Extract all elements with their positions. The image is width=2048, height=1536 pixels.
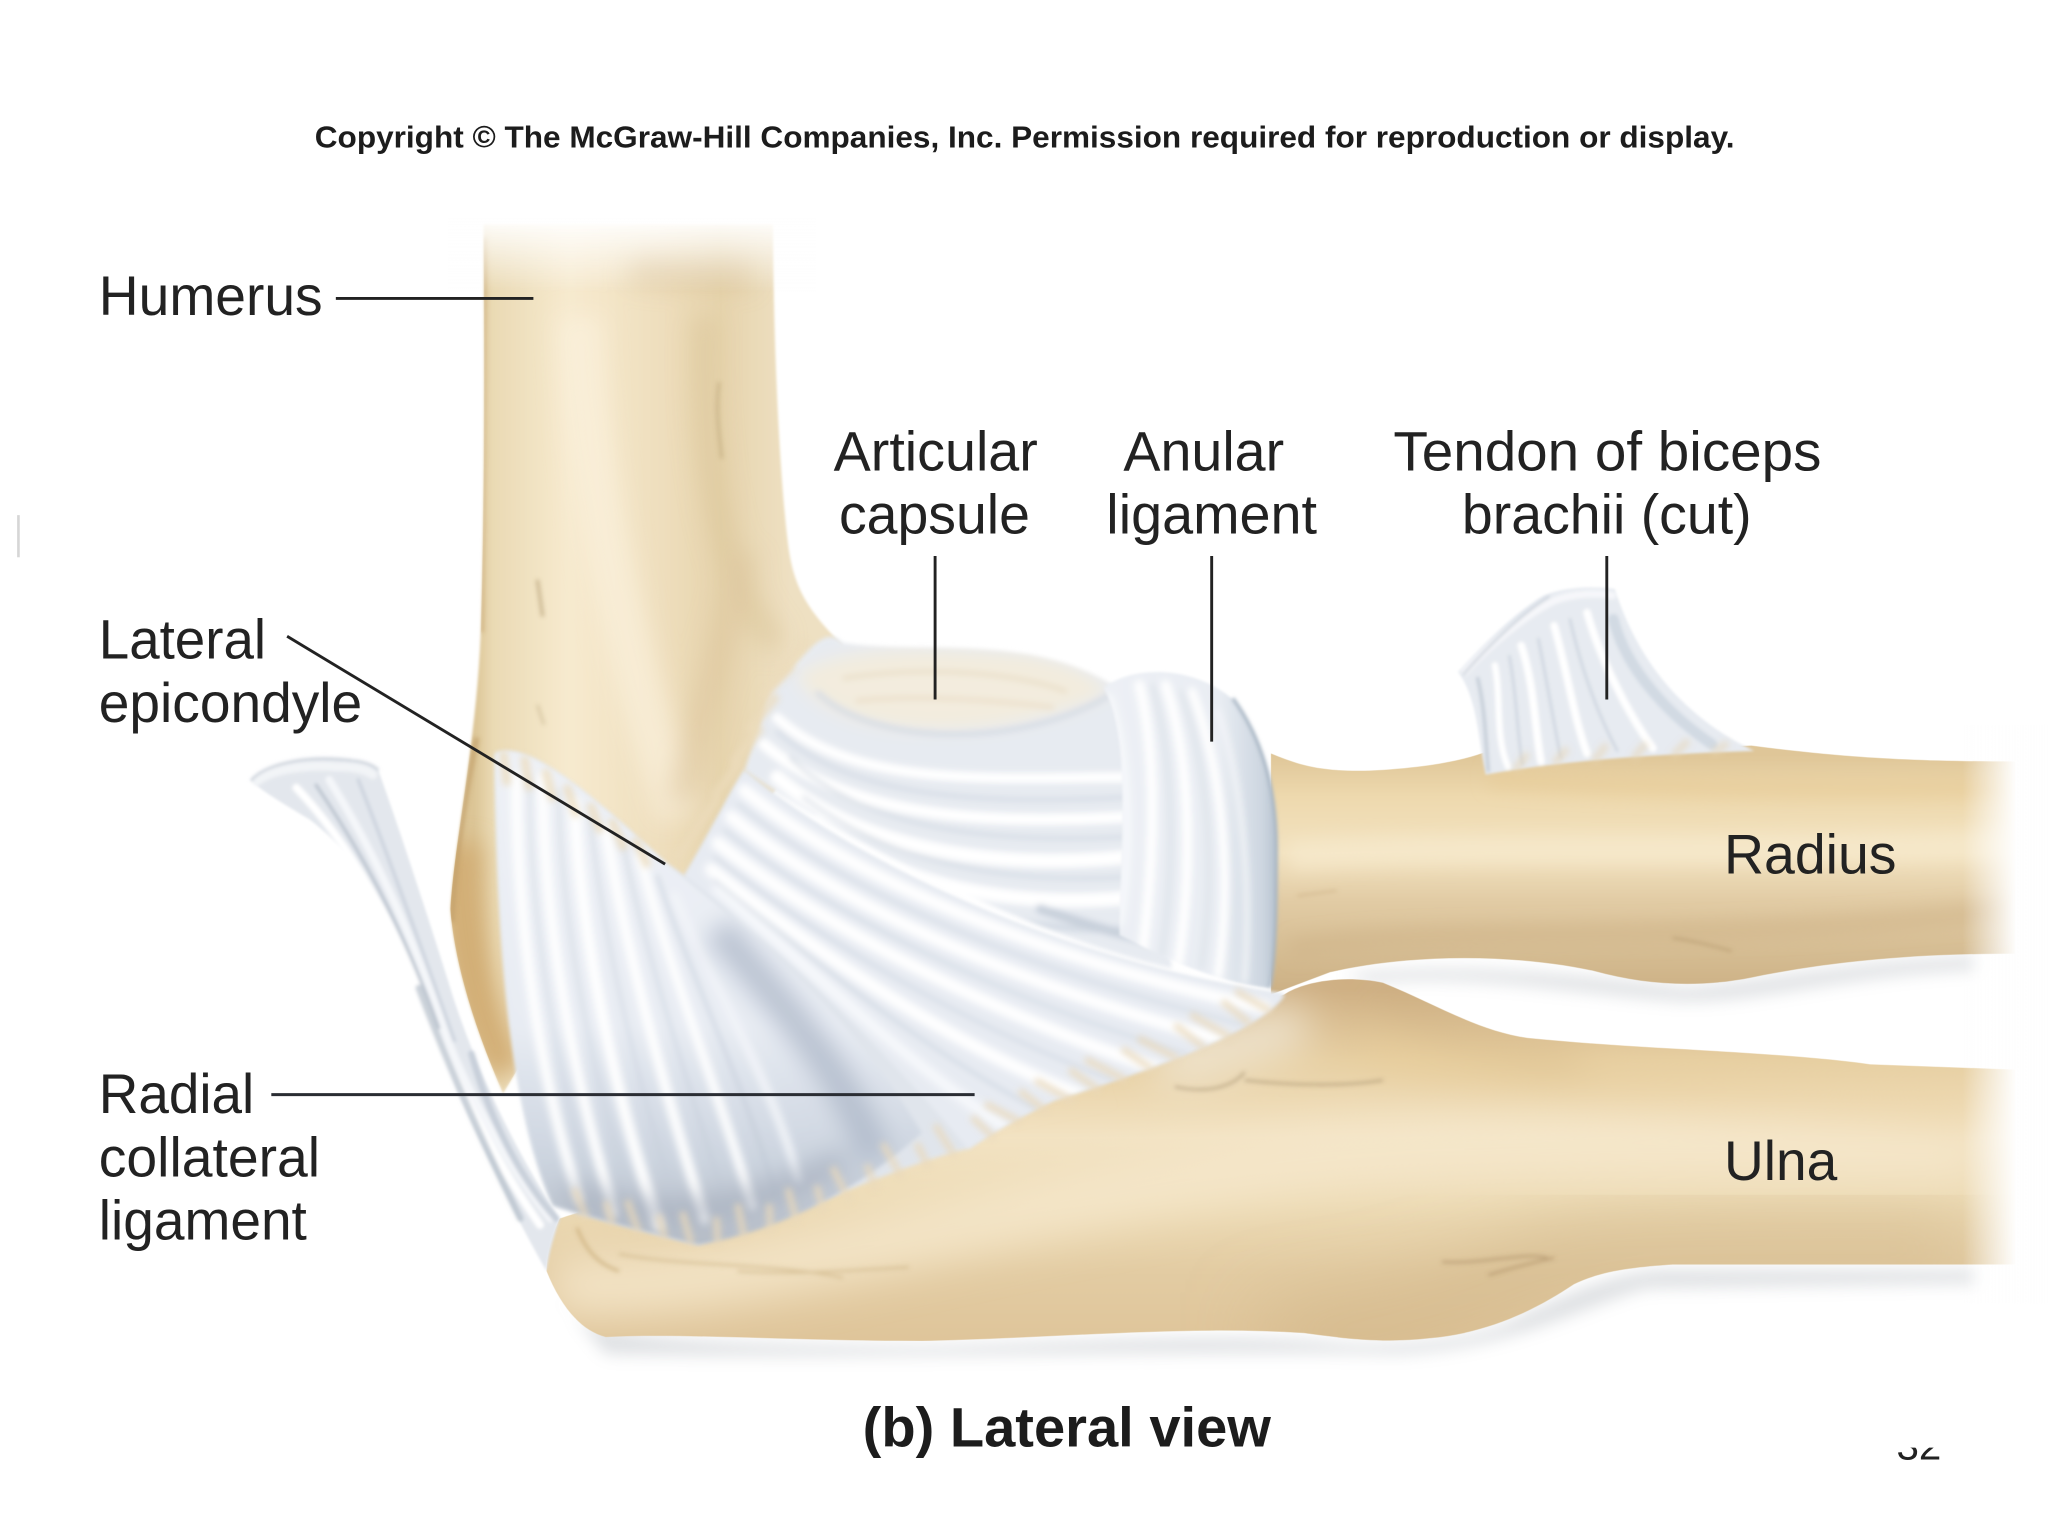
copyright line: Copyright © The McGraw-Hill Companies, Inc. Permission required for reproduction or display. bbox=[315, 120, 1735, 155]
radial collateral ligament: posterior lobe bbox=[493, 750, 920, 1246]
label: Anular ligament: Anular bbox=[1123, 420, 1284, 482]
anular ligament bbox=[1104, 672, 1276, 988]
ulna surface marks bbox=[577, 1072, 1554, 1278]
label: Articular capsule bbox=[834, 420, 1038, 700]
label: Lateral epicondyle bbox=[99, 609, 665, 864]
articular capsule bbox=[744, 637, 1172, 968]
radial collateral ligament: anterior fan bbox=[684, 771, 1286, 1149]
clipped slide number: 32 bbox=[1897, 1424, 1941, 1468]
label: Radial collateral ligament bbox=[99, 1063, 975, 1252]
label: Ulna: Ulna bbox=[1724, 1130, 1838, 1192]
shadow at lobe base and between lobes bbox=[566, 929, 876, 1212]
label: Radial collateral ligament: ligament bbox=[99, 1190, 307, 1252]
label: Radius: Radius bbox=[1724, 823, 1897, 885]
ulna bone bbox=[547, 979, 2015, 1341]
ulna lower shading bbox=[1264, 1248, 1976, 1337]
fibres of tendon blending into radius bbox=[1515, 740, 1728, 771]
label: Radial collateral ligament: Radial bbox=[99, 1063, 254, 1125]
blend of ligament into humerus bbox=[503, 640, 806, 867]
label: Articular capsule: Articular bbox=[834, 420, 1038, 482]
caption: (b) Lateral view bbox=[863, 1396, 1272, 1458]
ulna tonal streaks bbox=[553, 1004, 1976, 1337]
label: Lateral epicondyle: epicondyle bbox=[99, 672, 362, 734]
humerus shading streaks bbox=[452, 237, 777, 1074]
margin tick mark bbox=[17, 515, 20, 557]
fade at top of humerus bbox=[448, 198, 817, 293]
label: Tendon of biceps brachii (cut) bbox=[1393, 420, 1821, 700]
humerus bone bbox=[450, 224, 843, 1093]
label: Tendon of biceps brachii (cut): brachii (cut) bbox=[1462, 484, 1752, 546]
fibres blending into ulna bbox=[574, 991, 1271, 1245]
label: Anular ligament bbox=[1106, 420, 1317, 742]
fade at right end of forearm bones bbox=[1962, 725, 2048, 1304]
backing of radial collateral ligament bbox=[495, 751, 1284, 1245]
label: Articular capsule: capsule bbox=[839, 484, 1030, 546]
label: Humerus: Humerus bbox=[99, 265, 323, 327]
label: Radial collateral ligament: collateral bbox=[99, 1126, 320, 1188]
radius surface marks bbox=[1298, 788, 1976, 952]
tendon of biceps brachii bbox=[1458, 587, 1754, 775]
radius bone bbox=[1271, 746, 2015, 995]
bone drop shadows bbox=[560, 956, 1976, 1356]
label: Lateral epicondyle: Lateral bbox=[99, 609, 266, 671]
capsule beige cap bbox=[797, 650, 1109, 729]
cut tendon on ulna (left) bbox=[250, 758, 560, 1271]
label: Tendon of biceps brachii (cut): Tendon of biceps bbox=[1393, 420, 1821, 482]
label: Anular ligament: ligament bbox=[1106, 484, 1317, 546]
